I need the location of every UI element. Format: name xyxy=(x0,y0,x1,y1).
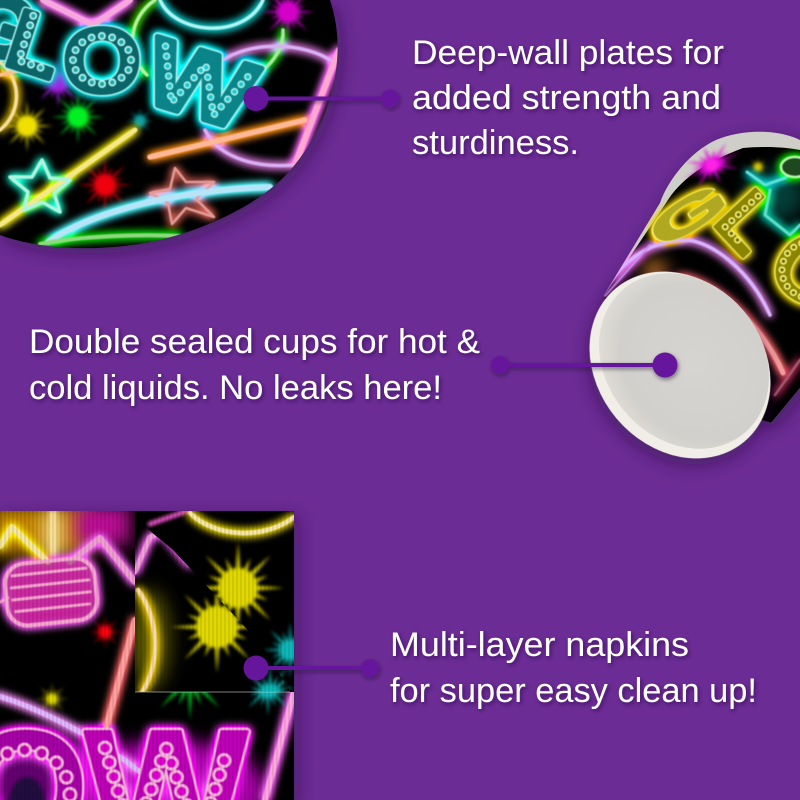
connector: napkin xyxy=(244,656,379,680)
callout: napkins text: for super easy clean up! xyxy=(390,672,757,710)
cup letters GLOW: L xyxy=(697,173,798,272)
napkin letters OW xyxy=(0,718,259,800)
cup body xyxy=(603,132,800,423)
plate letters GLOW xyxy=(0,0,267,151)
plate letters GLOW: W xyxy=(132,17,267,151)
callout: cups text: Double sealed cups for hot & xyxy=(29,323,480,361)
panel: cup xyxy=(580,128,800,473)
connector: plate xyxy=(244,86,399,111)
panel: napkin xyxy=(0,505,318,800)
callout: napkins text xyxy=(390,626,757,710)
callout: plates text: added strength and xyxy=(412,79,721,117)
plate neon artwork xyxy=(0,0,339,244)
napkin upper fold sheet xyxy=(135,511,294,715)
cup letters GLOW: L xyxy=(697,173,798,272)
cup letters GLOW xyxy=(644,179,800,312)
cup neon artwork xyxy=(603,133,800,430)
callout: plates text: sturdiness. xyxy=(412,124,579,162)
cup letters GLOW: G xyxy=(639,172,737,259)
callout: cups text xyxy=(29,323,480,407)
napkin base layer art xyxy=(0,505,294,800)
callout: cups text: cold liquids. No leaks here! xyxy=(29,369,442,407)
plate letters GLOW: W xyxy=(132,17,267,151)
napkin folded corner xyxy=(135,528,290,692)
napkin neon artwork xyxy=(0,505,318,800)
callout: plates text: Deep-wall plates for xyxy=(412,34,724,72)
cup base xyxy=(552,235,800,495)
plate letters GLOW: O xyxy=(63,9,141,112)
plate letters GLOW: O xyxy=(63,9,141,112)
callout: napkins text: Multi-layer napkins xyxy=(390,626,689,664)
callout: plates text xyxy=(412,34,724,162)
panel: plate xyxy=(0,0,339,248)
connector: cup xyxy=(491,352,678,378)
cup letters GLOW: G xyxy=(639,172,737,259)
